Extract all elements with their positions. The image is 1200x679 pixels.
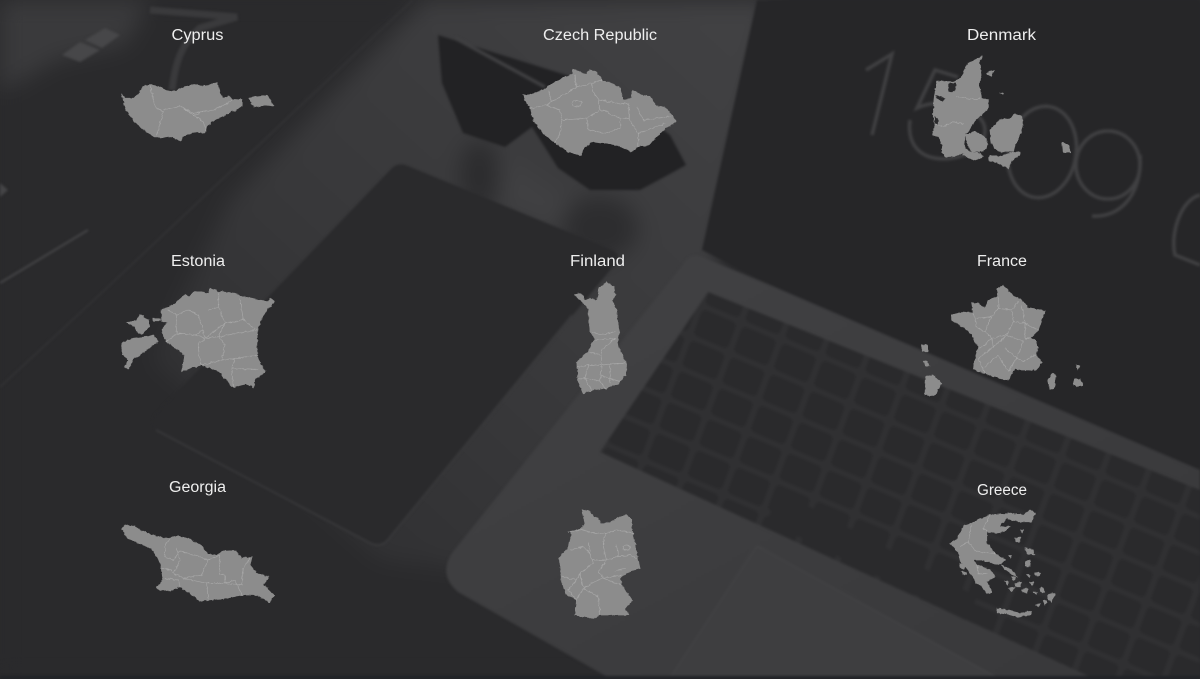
sunglasses arm [455, 38, 545, 87]
map: Georgia [122, 525, 274, 602]
panel: Germany [559, 509, 640, 618]
bottom strip [0, 676, 1200, 679]
tablet [153, 164, 618, 544]
spacebar [766, 493, 977, 620]
map: Cyprus [122, 83, 274, 141]
panel: Czech Republic [524, 27, 676, 155]
clock digits on screen [866, 54, 1200, 265]
panel: Greece [950, 482, 1055, 617]
camera details [0, 0, 413, 387]
heading: Cyprus: Cyprus [172, 27, 224, 44]
panel: France [922, 253, 1083, 395]
touchpad [670, 546, 998, 678]
panel: Georgia [122, 479, 274, 602]
map: Greece [950, 510, 1055, 617]
heading: Greece: Greece [977, 482, 1027, 499]
laptop screen [702, 0, 1200, 470]
sunglasses [438, 35, 686, 190]
keyboard keys [600, 292, 1200, 679]
heading: Denmark: Denmark [967, 27, 1036, 44]
heading: Finland: Finland [570, 253, 625, 270]
heading: Czech Republic: Czech Republic [543, 27, 657, 44]
map: Denmark [933, 56, 1071, 168]
heading: France: France [977, 253, 1027, 270]
map: Estonia [122, 288, 274, 387]
panel: Finland [570, 253, 627, 393]
heading: Estonia: Estonia [171, 253, 225, 270]
map: Czech Republic [524, 69, 676, 155]
laptop base [446, 256, 1200, 679]
heading: Georgia: Georgia [169, 479, 226, 496]
tablet lower edge highlight [156, 315, 572, 545]
map: Finland [575, 282, 627, 393]
panel: Estonia [122, 253, 274, 387]
panel: Denmark [933, 27, 1071, 168]
map: France [922, 286, 1083, 395]
panel: Cyprus [122, 27, 274, 141]
map: Germany [559, 509, 640, 618]
